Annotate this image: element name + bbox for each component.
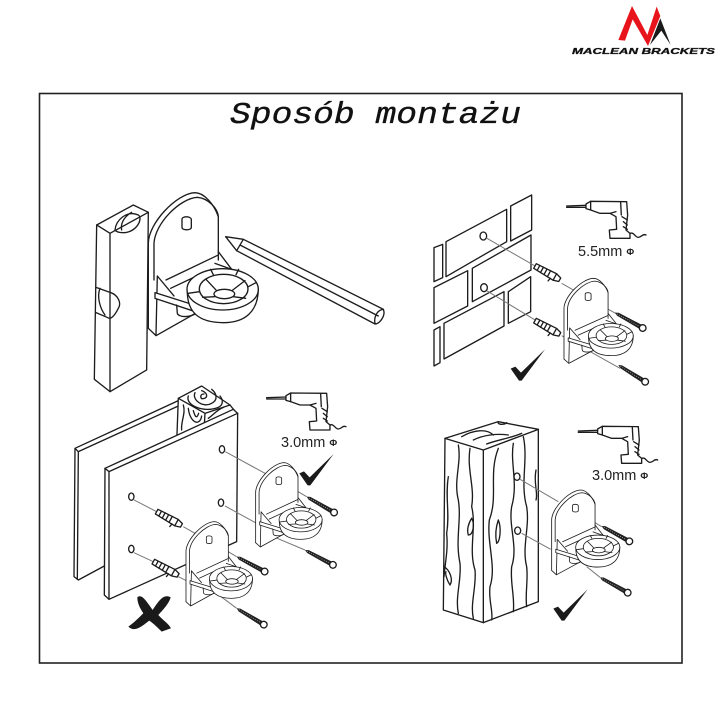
- guide lines: [520, 479, 602, 577]
- panel: brick wall mounting: [434, 195, 650, 386]
- drill size label 3.0mm board: 3.0mm: [281, 435, 325, 451]
- drill size label 3.0mm timber: Φ: [640, 471, 648, 482]
- check mark: [511, 349, 545, 381]
- bracket wrong position: [186, 522, 253, 606]
- drill size label 5.5mm: Φ: [626, 247, 634, 258]
- main frame panel: [40, 94, 682, 663]
- bracket: [552, 490, 620, 575]
- drill size label 5.5mm: 5.5mm: [578, 244, 622, 260]
- icon: drill: [578, 426, 658, 463]
- bracket correct position: [256, 463, 322, 547]
- screws: [235, 494, 339, 629]
- logo mark: black peak: [650, 18, 671, 45]
- drill size label 3.0mm timber: 3.0mm: [592, 468, 636, 484]
- back board: [74, 401, 178, 580]
- icon: drill: [567, 201, 646, 238]
- icon: large bracket: [148, 193, 258, 336]
- guide lines: [134, 452, 307, 608]
- timber block: [443, 422, 538, 623]
- screws: [613, 310, 650, 386]
- cross mark: [128, 596, 171, 632]
- guide lines: [486, 238, 620, 368]
- drill size label 3.0mm board: Φ: [329, 438, 337, 449]
- timber stud: [177, 386, 237, 443]
- brick wall: [434, 195, 532, 366]
- bracket: [564, 278, 633, 363]
- wall anchors: [532, 263, 562, 340]
- screws: [598, 523, 634, 597]
- front board: [104, 409, 238, 599]
- wall anchors: [150, 508, 183, 581]
- panel: plasterboard mounting: [74, 386, 346, 632]
- check mark: [553, 589, 588, 621]
- icon: pencil: [226, 237, 384, 324]
- title: Sposób montażu: [230, 98, 521, 133]
- icon: drill: [267, 393, 346, 430]
- panel: marking with level and pencil: [94, 193, 384, 392]
- logo mark: red M: [618, 6, 660, 46]
- logo: Maclean Brackets: [572, 6, 715, 56]
- icon: spirit level: [94, 205, 148, 392]
- panel: timber mounting: [443, 422, 658, 623]
- logo wordmark: MACLEAN BRACKETS: [572, 46, 715, 56]
- check mark: [299, 454, 334, 485]
